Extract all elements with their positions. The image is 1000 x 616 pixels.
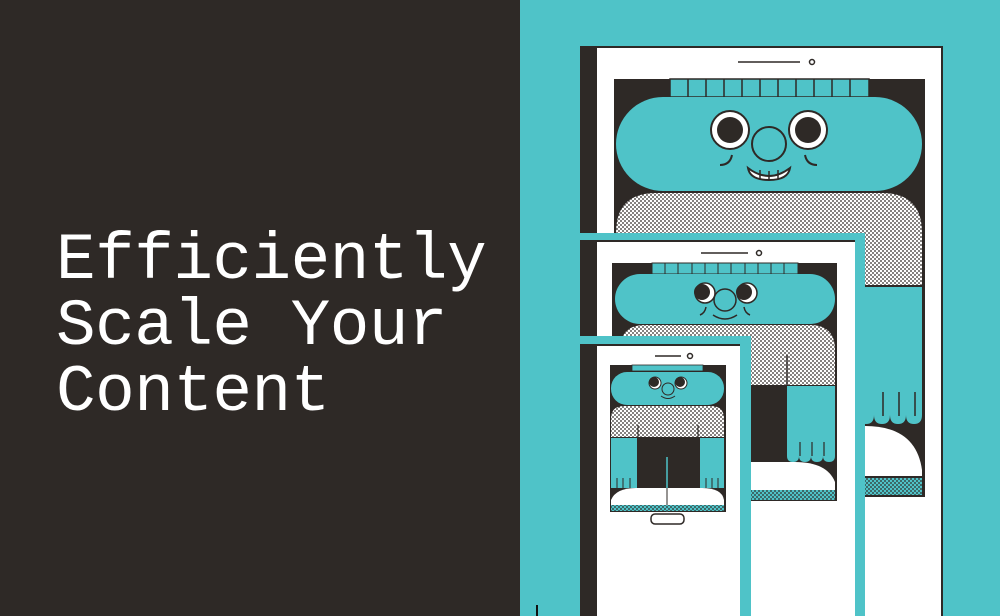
- arm: [857, 287, 922, 424]
- device: large tablet: [580, 46, 943, 616]
- title: Efficiently: [56, 223, 486, 298]
- head: [616, 97, 922, 191]
- device: medium tablet: [578, 233, 865, 616]
- panel: left dark: [0, 0, 520, 616]
- title: Scale Your: [56, 289, 447, 364]
- title: Content: [56, 355, 330, 430]
- illustration: scaling devices: [520, 0, 1000, 616]
- hat: [670, 79, 869, 97]
- title: [56, 223, 486, 430]
- body: [616, 193, 922, 285]
- device: phone: [578, 336, 751, 616]
